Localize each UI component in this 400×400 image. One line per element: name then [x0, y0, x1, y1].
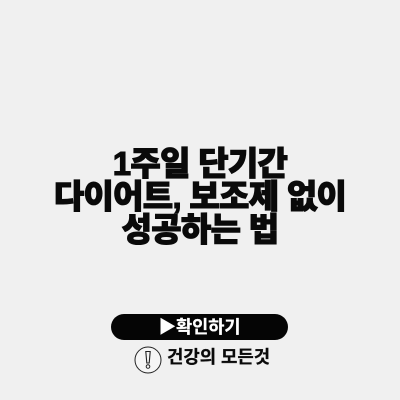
- title: 1주일 단기간: [113, 145, 287, 182]
- title: 다이어트, 보조제 없이: [54, 178, 346, 215]
- button: confirm: ▶확인하기: [159, 317, 240, 337]
- title: 성공하는 법: [122, 211, 278, 248]
- title: [54, 145, 346, 248]
- button: confirm: [111, 314, 288, 340]
- brand name: 건강의 모든것: [167, 347, 270, 367]
- icon: exclamation circle: [134, 346, 162, 374]
